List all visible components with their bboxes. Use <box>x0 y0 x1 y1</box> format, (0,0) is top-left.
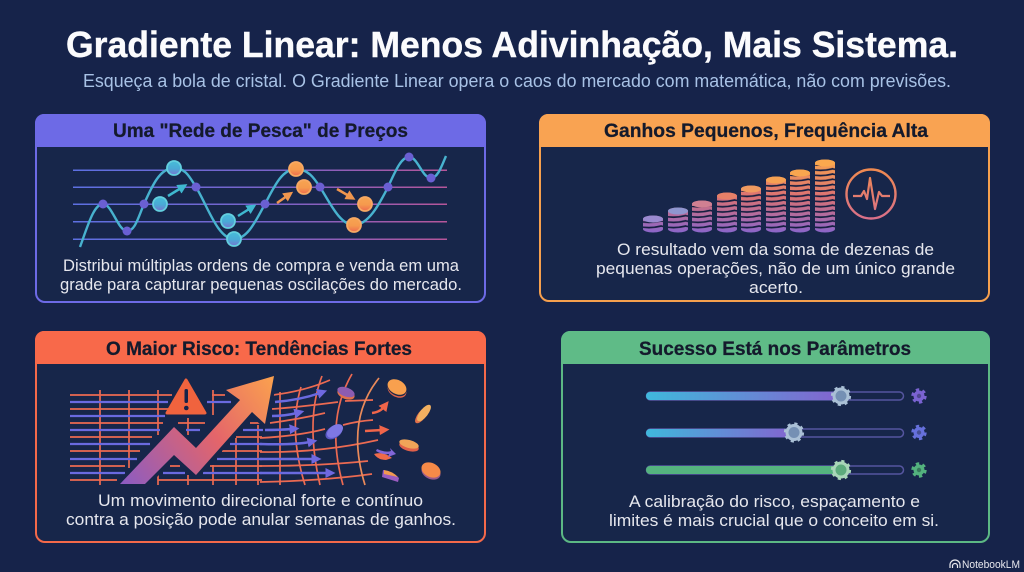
icon: rising arrow <box>120 376 274 484</box>
text: rede de pesca: Distribui múltiplas ordens de compra e venda em uma <box>63 256 460 275</box>
icon: gear blue <box>913 426 925 439</box>
title: Gradiente Linear: Menos Adivinhação, Mais Sistema. <box>66 24 958 65</box>
heading: parametros: Sucesso Está nos Parâmetros <box>639 339 911 360</box>
panel: rede de pesca <box>35 114 486 302</box>
slider: espacamento <box>646 424 904 442</box>
icon: pulse <box>846 170 896 218</box>
text: maior risco: contra a posição pode anular semanas de ganhos. <box>66 510 456 529</box>
heading: maior risco: O Maior Risco: Tendências Fortes <box>106 339 412 360</box>
slider: risco <box>646 387 904 405</box>
text: ganhos pequenos: O resultado vem da soma de dezenas de <box>617 240 934 259</box>
heading: parametros <box>561 331 990 364</box>
chart: coin stacks <box>643 160 835 232</box>
text: ganhos pequenos <box>596 240 955 297</box>
icon: warning triangle <box>167 380 205 413</box>
heading: ganhos pequenos: Ganhos Pequenos, Frequência Alta <box>604 121 928 142</box>
icon: gear purple <box>913 390 925 402</box>
heading: ganhos pequenos <box>539 114 990 147</box>
heading: maior risco <box>35 331 486 364</box>
text: ganhos pequenos: acerto. <box>749 278 803 297</box>
text: parametros: A calibração do risco, espaçamento e <box>629 492 920 511</box>
heading: rede de pesca <box>35 114 486 147</box>
logo: NotebookLM: NotebookLM <box>962 559 1020 571</box>
chart: distorted grid <box>70 374 379 485</box>
subtitle: Esqueça a bola de cristal. O Gradiente Linear opera o caos do mercado com matemática, não com previsões. <box>83 71 951 91</box>
panel: maior risco <box>35 331 486 542</box>
text: ganhos pequenos: pequenas operações, não de um único grande <box>596 259 955 278</box>
text: parametros <box>609 492 939 530</box>
panel: ganhos pequenos <box>539 114 990 301</box>
text: maior risco <box>66 491 456 529</box>
icon: gear green <box>913 464 925 476</box>
flying coins <box>323 376 443 483</box>
text: maior risco: Um movimento direcional forte e contínuo <box>98 491 423 510</box>
slider: limites <box>646 461 904 479</box>
text: parametros: limites é mais crucial que o conceito em si. <box>609 511 939 530</box>
panel: parametros <box>561 331 990 542</box>
text: rede de pesca: grade para capturar pequenas oscilações do mercado. <box>60 275 462 294</box>
heading: rede de pesca: Uma "Rede de Pesca" de Preços <box>113 121 408 142</box>
chart: price wave on grid <box>73 152 447 247</box>
text: rede de pesca <box>60 256 462 294</box>
